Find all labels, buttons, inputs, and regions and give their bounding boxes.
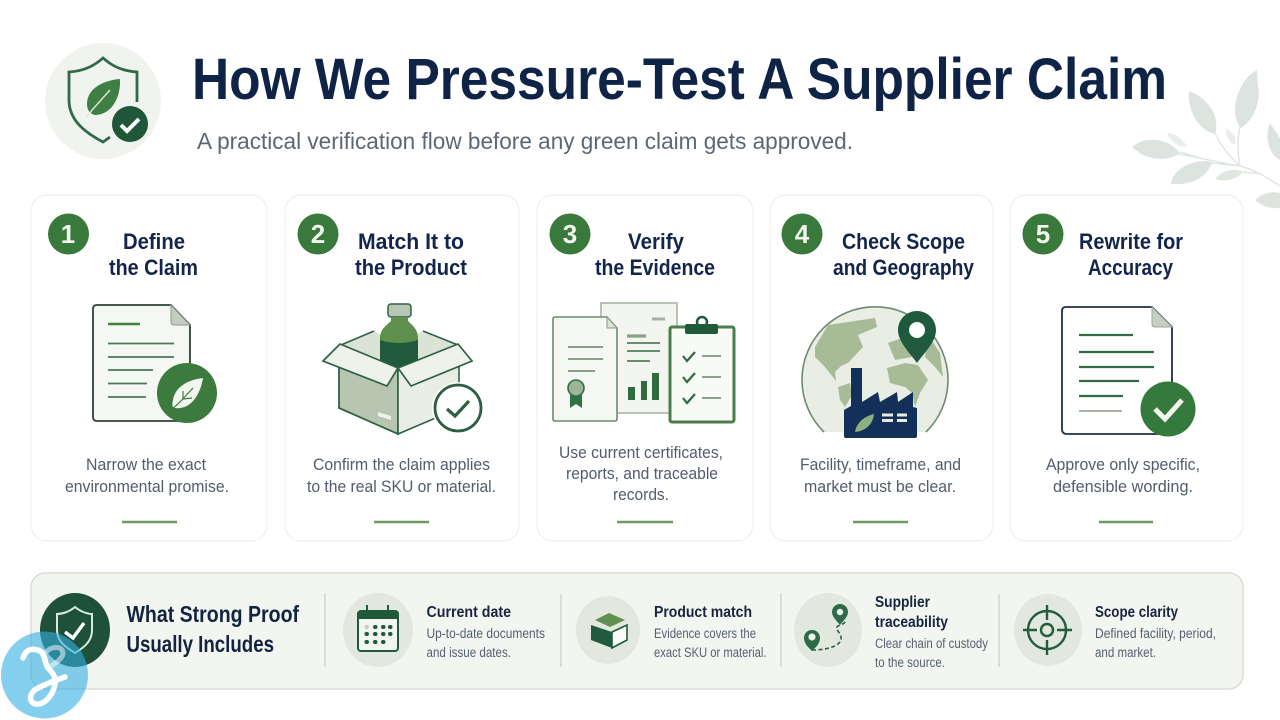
icon: document with leaf <box>93 305 217 423</box>
badge 2 <box>298 214 338 254</box>
text: Defined facility, period, <box>1095 626 1216 641</box>
description: reports, and traceable <box>566 464 718 483</box>
heading: What Strong Proof <box>126 601 299 627</box>
description: environmental promise. <box>65 477 229 496</box>
text: to the source. <box>875 655 945 670</box>
description: records. <box>613 485 669 504</box>
heading: define the claim <box>109 229 198 280</box>
icon: shield with check <box>40 593 110 667</box>
badge 1: 1 <box>61 219 75 249</box>
text <box>1095 604 1216 660</box>
heading: rewrite for accuracy: Rewrite for <box>1079 229 1183 254</box>
item: supplier traceability <box>794 593 988 670</box>
text: Scope clarity <box>1095 604 1178 621</box>
panel: step 4 check scope and geography <box>770 195 993 541</box>
badge 3 <box>550 214 590 254</box>
description: defensible wording. <box>1053 477 1193 496</box>
heading <box>126 601 299 657</box>
heading: rewrite for accuracy: Accuracy <box>1088 255 1174 280</box>
icon: box with bottle and check <box>323 304 484 434</box>
description <box>800 455 961 496</box>
description <box>307 455 496 496</box>
subtitle: A practical verification flow before any green claim gets approved. <box>197 128 853 154</box>
decorative leaf branch <box>1132 70 1280 208</box>
badge 2: 2 <box>311 219 325 249</box>
heading: check scope and geography <box>833 229 975 280</box>
description: market must be clear. <box>804 477 956 496</box>
icon: globe with pin and factory <box>802 307 948 438</box>
text: traceability <box>875 614 948 631</box>
description <box>559 443 723 504</box>
heading: rewrite for accuracy <box>1079 229 1183 280</box>
badge 5 <box>1022 214 1064 254</box>
text: Clear chain of custody <box>875 636 988 651</box>
text: Evidence covers the <box>654 626 756 641</box>
icon: calendar <box>343 593 413 667</box>
badge 1 <box>48 214 89 254</box>
header icon: shield with leaf and check <box>45 43 161 159</box>
item: current date <box>343 593 545 667</box>
heading: match it to the product: the Product <box>355 255 468 280</box>
item: scope clarity <box>1014 594 1216 666</box>
icon: route with pins <box>794 593 862 667</box>
title: How We Pressure-Test A Supplier Claim <box>192 47 1167 112</box>
badge 4: 4 <box>795 219 810 249</box>
text <box>426 604 545 660</box>
text: Current date <box>426 604 511 621</box>
heading: verify the evidence: the Evidence <box>595 255 715 280</box>
heading: Usually Includes <box>126 631 274 657</box>
description: Use current certificates, <box>559 443 723 462</box>
badge 5: 5 <box>1036 219 1050 249</box>
heading: match it to the product <box>355 229 468 280</box>
description: to the real SKU or material. <box>307 477 496 496</box>
heading: define the claim: Define <box>123 229 185 254</box>
description: Narrow the exact <box>86 455 206 474</box>
text: and issue dates. <box>426 645 511 660</box>
heading: verify the evidence <box>595 229 715 280</box>
text: exact SKU or material. <box>654 645 766 660</box>
watermark logo <box>1 632 88 718</box>
text <box>654 604 766 660</box>
description: Approve only specific, <box>1046 455 1200 474</box>
icon: target <box>1014 594 1082 666</box>
description: Facility, timeframe, and <box>800 455 961 474</box>
heading: check scope and geography: Check Scope <box>842 229 965 254</box>
panel: step 1 define the claim <box>31 195 267 541</box>
badge 3: 3 <box>563 219 577 249</box>
item: product match <box>576 596 766 664</box>
text: Supplier <box>875 594 930 611</box>
description: Confirm the claim applies <box>313 455 490 474</box>
icon: cube <box>576 596 640 664</box>
heading: check scope and geography: and Geography <box>833 255 975 280</box>
panel: step 2 match it to the product <box>285 195 519 541</box>
heading: define the claim: the Claim <box>109 255 198 280</box>
panel: step 5 rewrite for accuracy <box>1010 195 1243 541</box>
text: Up-to-date documents <box>426 626 545 641</box>
description <box>1046 455 1200 496</box>
heading: verify the evidence: Verify <box>628 229 685 254</box>
text <box>875 594 988 670</box>
icon: document with check <box>1062 307 1196 436</box>
icon: certificate, report and checklist <box>553 303 734 422</box>
panel: what strong proof usually includes <box>31 573 1243 689</box>
text: Product match <box>654 604 752 621</box>
panel: step 3 verify the evidence <box>537 195 753 541</box>
description <box>65 455 229 496</box>
text: and market. <box>1095 645 1156 660</box>
heading: match it to the product: Match It to <box>358 229 464 254</box>
badge 4 <box>782 214 822 254</box>
